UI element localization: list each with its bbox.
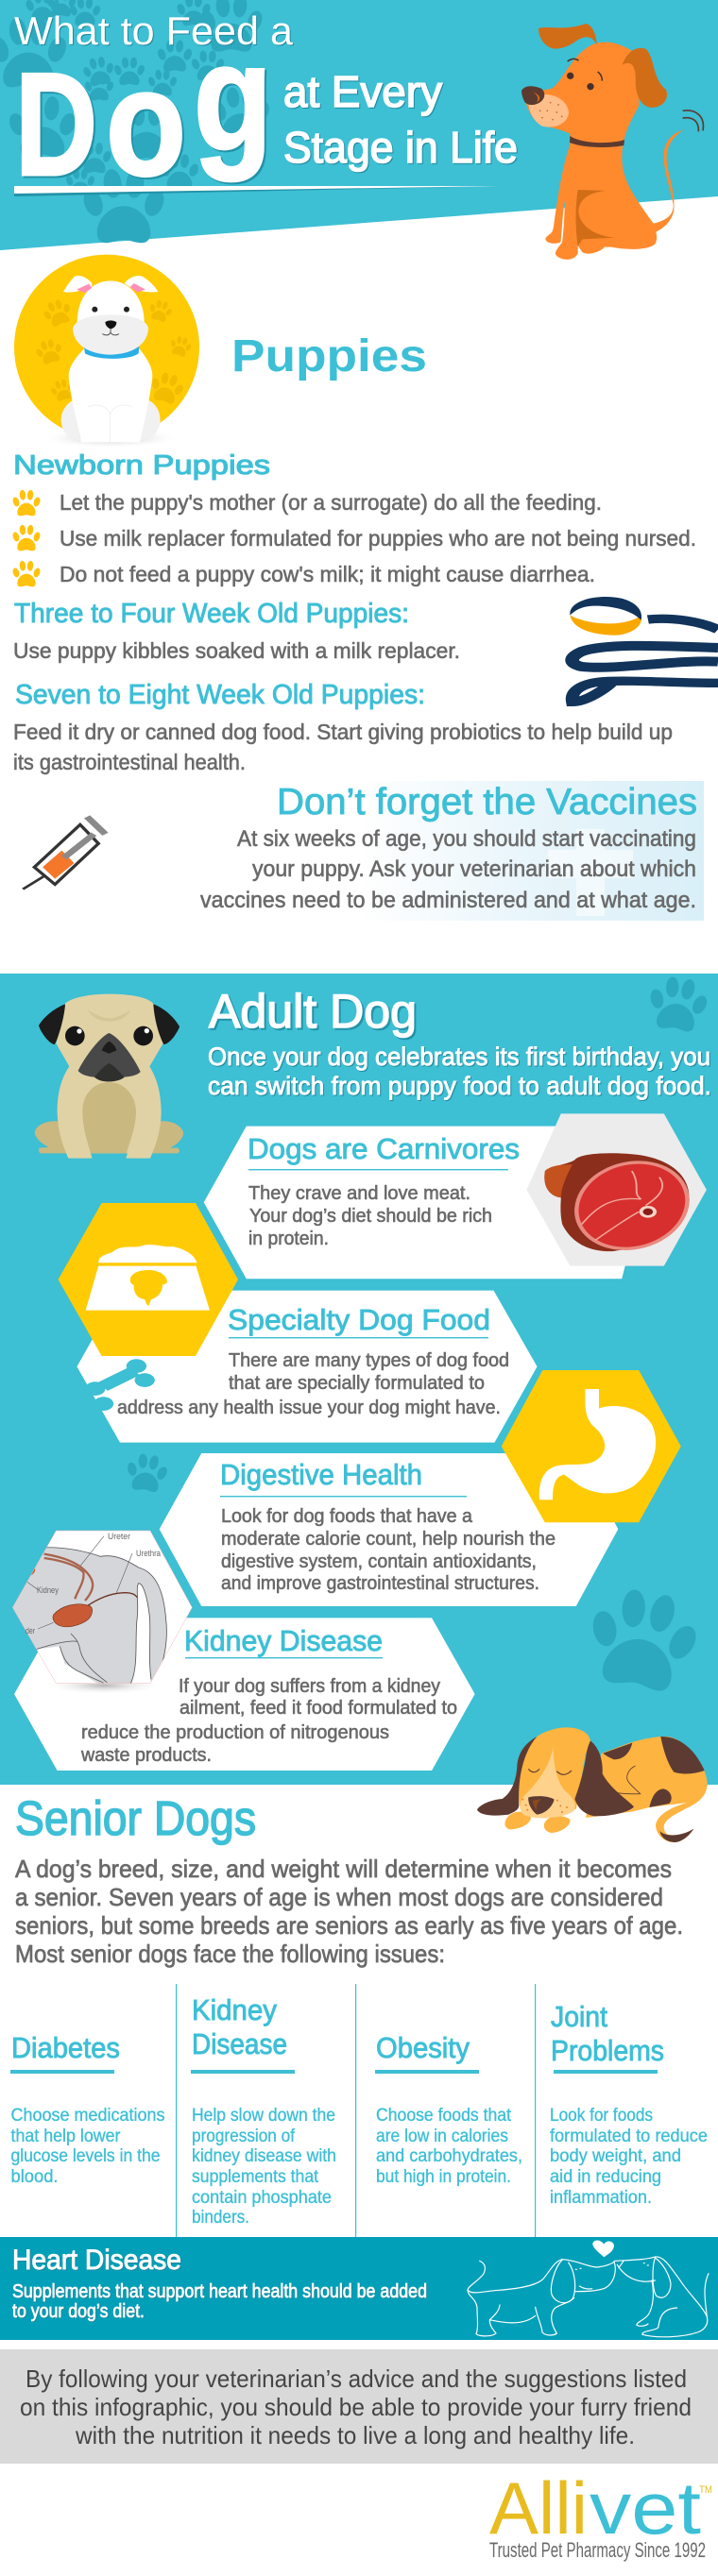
heading: adult dog: Adult Dog — [209, 985, 417, 1038]
column: kidney disease: Disease — [192, 2027, 287, 2060]
icon: pug — [35, 994, 183, 1159]
column dividers — [176, 1984, 536, 2237]
heading: heart disease: Heart Disease — [12, 2245, 181, 2276]
text: closing note — [20, 2364, 692, 2449]
icon: collar and leash — [570, 597, 718, 702]
text: specialty — [117, 1349, 509, 1418]
text: adult intro: Once your dog celebrates its first birthday, you — [208, 1042, 710, 1071]
column: obesity: Obesity — [376, 2031, 470, 2064]
column: kidney disease: contain phosphate — [192, 2187, 332, 2208]
background paws — [123, 974, 712, 1696]
section: newborn puppies — [11, 450, 696, 586]
title: at every stage in life: at Every — [283, 67, 442, 116]
diagram labels: Kidney — [37, 1585, 59, 1595]
text: senior intro — [15, 1855, 683, 1968]
column: kidney disease — [191, 1993, 336, 2228]
column: diabetes: blood. — [11, 2166, 59, 2187]
icon: kidney diagram — [9, 1525, 198, 1694]
column: joint problems: inflammation. — [550, 2187, 652, 2208]
header banner — [0, 0, 718, 250]
title: at every stage in life — [283, 67, 518, 172]
icon: food bowl — [59, 1203, 238, 1356]
title: Dog: D — [15, 42, 97, 206]
column: obesity — [375, 2031, 522, 2187]
icon: white puppy in yellow circle — [14, 255, 199, 449]
heading: Puppies: Puppies — [231, 331, 427, 381]
text: heart disease — [12, 2280, 427, 2322]
heading: carnivores: Dogs are Carnivores — [248, 1132, 520, 1165]
text: digestive: Look for dog foods that have a — [221, 1505, 473, 1527]
logo: Allivet: TM — [699, 2484, 712, 2496]
heading: newborn puppies: Newborn Puppies — [13, 450, 270, 481]
diagram labels — [26, 1532, 161, 1635]
section: three to four weeks — [13, 599, 460, 663]
panel: senior dogs — [10, 1791, 708, 2237]
column: diabetes: that help lower — [11, 2126, 121, 2146]
hexagon panel: specialty dog food — [59, 1203, 538, 1443]
text: carnivores: They crave and love meat. — [248, 1182, 470, 1204]
icon: meat — [526, 1113, 709, 1266]
text: specialty: There are many types of dog food — [229, 1349, 509, 1371]
panel: heart disease — [0, 2237, 718, 2340]
text: vaccines: vaccines need to be administered and at what age. — [200, 888, 696, 913]
hexagon panel: dogs are carnivores — [204, 1113, 709, 1279]
column: joint problems: formulated to reduce — [550, 2126, 708, 2146]
icon: orange dog — [521, 24, 703, 260]
column: obesity: Choose foods that — [376, 2105, 512, 2126]
title: at every stage in life: Stage in Life — [283, 123, 518, 172]
column: joint problems: Joint — [551, 2000, 607, 2033]
hexagon panel: digestive health — [160, 1370, 681, 1606]
text: vaccines: your puppy. Ask your veterinarian about which — [252, 856, 696, 882]
bullet text 1: Let the puppy's mother (or a surrogate) do all the feeding. — [60, 490, 602, 515]
title: Dog: g — [194, 12, 272, 181]
bullet paw 1 — [11, 489, 42, 516]
diagram labels: der — [26, 1626, 35, 1635]
title: Dog — [15, 12, 272, 207]
text: closing note: By following your veterinarian’s advice and the suggestions listed — [26, 2364, 687, 2393]
text: carnivores — [248, 1182, 492, 1249]
logo: Allivet: Alli — [489, 2466, 588, 2550]
text: adult intro — [208, 1042, 711, 1100]
column: obesity: but high in protein. — [376, 2166, 511, 2187]
column: kidney disease: kidney disease with — [192, 2145, 336, 2166]
section: seven to eight weeks — [13, 680, 673, 774]
column: diabetes: Diabetes — [11, 2031, 120, 2064]
title underline — [14, 186, 501, 196]
text: digestive: and improve gastrointestinal structures. — [221, 1572, 539, 1594]
heading: three to four weeks: Three to Four Week Old Puppies: — [14, 599, 409, 629]
text: dry or canned food: its gastrointestinal health. — [13, 750, 246, 774]
column: joint problems: Look for foods — [550, 2105, 653, 2126]
icon: stomach — [502, 1370, 681, 1522]
column: kidney disease: supplements that — [192, 2166, 319, 2187]
text: dry or canned food: Feed it dry or canned dog food. Start giving probiotics to help build up — [13, 720, 673, 744]
column: kidney disease: Kidney — [192, 1993, 277, 2026]
text: kidney: If your dog suffers from a kidney — [179, 1675, 441, 1697]
column: diabetes: Choose medications — [11, 2105, 165, 2126]
heading: kidney: Kidney Disease — [184, 1624, 383, 1657]
column: obesity: are low in calories — [376, 2126, 508, 2146]
panel: vaccines — [23, 781, 704, 921]
icon: outlined dogs with heart — [468, 2241, 709, 2337]
icon: bone — [85, 1359, 155, 1411]
text: closing note: with the nutrition it needs to live a long and healthy life. — [75, 2421, 635, 2449]
heading: senior dogs: Senior Dogs — [15, 1791, 256, 1845]
text: kidney — [80, 1675, 457, 1766]
text: kidney: ailment, feed it food formulated to — [180, 1697, 457, 1719]
text: heart disease: Supplements that support heart health should be added — [12, 2280, 427, 2302]
diagram labels: Ureter — [108, 1532, 130, 1541]
column: joint problems: aid in reducing — [550, 2166, 661, 2187]
bullet text 3: Do not feed a puppy cow's milk; it might cause diarrhea. — [60, 562, 595, 586]
text: digestive: moderate calorie count, help nourish the — [221, 1528, 556, 1550]
text: senior intro: A dog’s breed, size, and weight will determine when it becomes — [15, 1855, 672, 1883]
text: vaccines — [200, 826, 696, 913]
text: senior intro: Most senior dogs face the following issues: — [15, 1940, 445, 1968]
heading: seven to eight weeks: Seven to Eight Week Old Puppies: — [15, 680, 425, 710]
column: kidney disease: binders. — [192, 2207, 249, 2228]
column: joint problems: body weight, and — [550, 2145, 681, 2166]
heading: don't forget the vaccines: Don’t forget the Vaccines — [277, 782, 697, 822]
title: what to feed a: What to Feed a — [14, 8, 294, 53]
hexagon panel: kidney disease — [9, 1525, 475, 1771]
diagram labels: Urethra — [136, 1549, 161, 1558]
icon: sleeping dog — [477, 1727, 708, 1842]
column: diabetes: glucose levels in the — [11, 2145, 161, 2166]
icon: syringe — [23, 817, 105, 890]
text: kibbles: Use puppy kibbles soaked with a milk replacer. — [13, 638, 460, 663]
column: diabetes — [10, 2031, 165, 2187]
bullet text 2: Use milk replacer formulated for puppies who are not being nursed. — [60, 526, 696, 551]
title: Dog: o — [106, 38, 186, 207]
faint circle paws — [33, 296, 194, 406]
text: senior intro: seniors, but some breeds are seniors as early as five years of age. — [15, 1911, 683, 1940]
text: kidney: reduce the production of nitrogenous — [81, 1721, 389, 1743]
column: obesity: and carbohydrates, — [376, 2145, 522, 2166]
column: kidney disease: progression of — [192, 2126, 296, 2146]
logo: Allivet: vet — [590, 2466, 701, 2550]
text: heart disease: to your dog’s diet. — [12, 2300, 145, 2322]
header paw pattern — [0, 0, 271, 243]
heading: digestive: Digestive Health — [220, 1458, 422, 1491]
column: joint problems: Problems — [551, 2034, 664, 2067]
text: dry or canned food — [13, 720, 673, 774]
text: carnivores: Your dog’s diet should be rich — [249, 1205, 492, 1227]
text: closing note: on this infographic, you should be able to provide your furry friend — [20, 2393, 692, 2421]
text: kidney: waste products. — [80, 1744, 212, 1766]
text: adult intro: can switch from puppy food to adult dog food. — [208, 1072, 711, 1100]
heading: specialty: Specialty Dog Food — [228, 1303, 490, 1336]
text: specialty: address any health issue your dog might have. — [117, 1397, 501, 1418]
text: digestive — [221, 1505, 556, 1594]
text: digestive: digestive system, contain antioxidants, — [221, 1551, 537, 1572]
text: senior intro: a senior. Seven years of age is when most dogs are considered — [15, 1883, 663, 1911]
bullet paw 3 — [11, 560, 42, 586]
panel: closing note — [0, 2349, 718, 2464]
bullet paw 2 — [11, 524, 42, 551]
logo: Allivet — [489, 2466, 712, 2562]
text: specialty: that are specially formulated to — [229, 1372, 485, 1394]
column: joint problems — [550, 2000, 708, 2208]
text: carnivores: in protein. — [248, 1228, 329, 1249]
panel: adult dog — [0, 974, 718, 1785]
column: kidney disease: Help slow down the — [192, 2105, 335, 2126]
